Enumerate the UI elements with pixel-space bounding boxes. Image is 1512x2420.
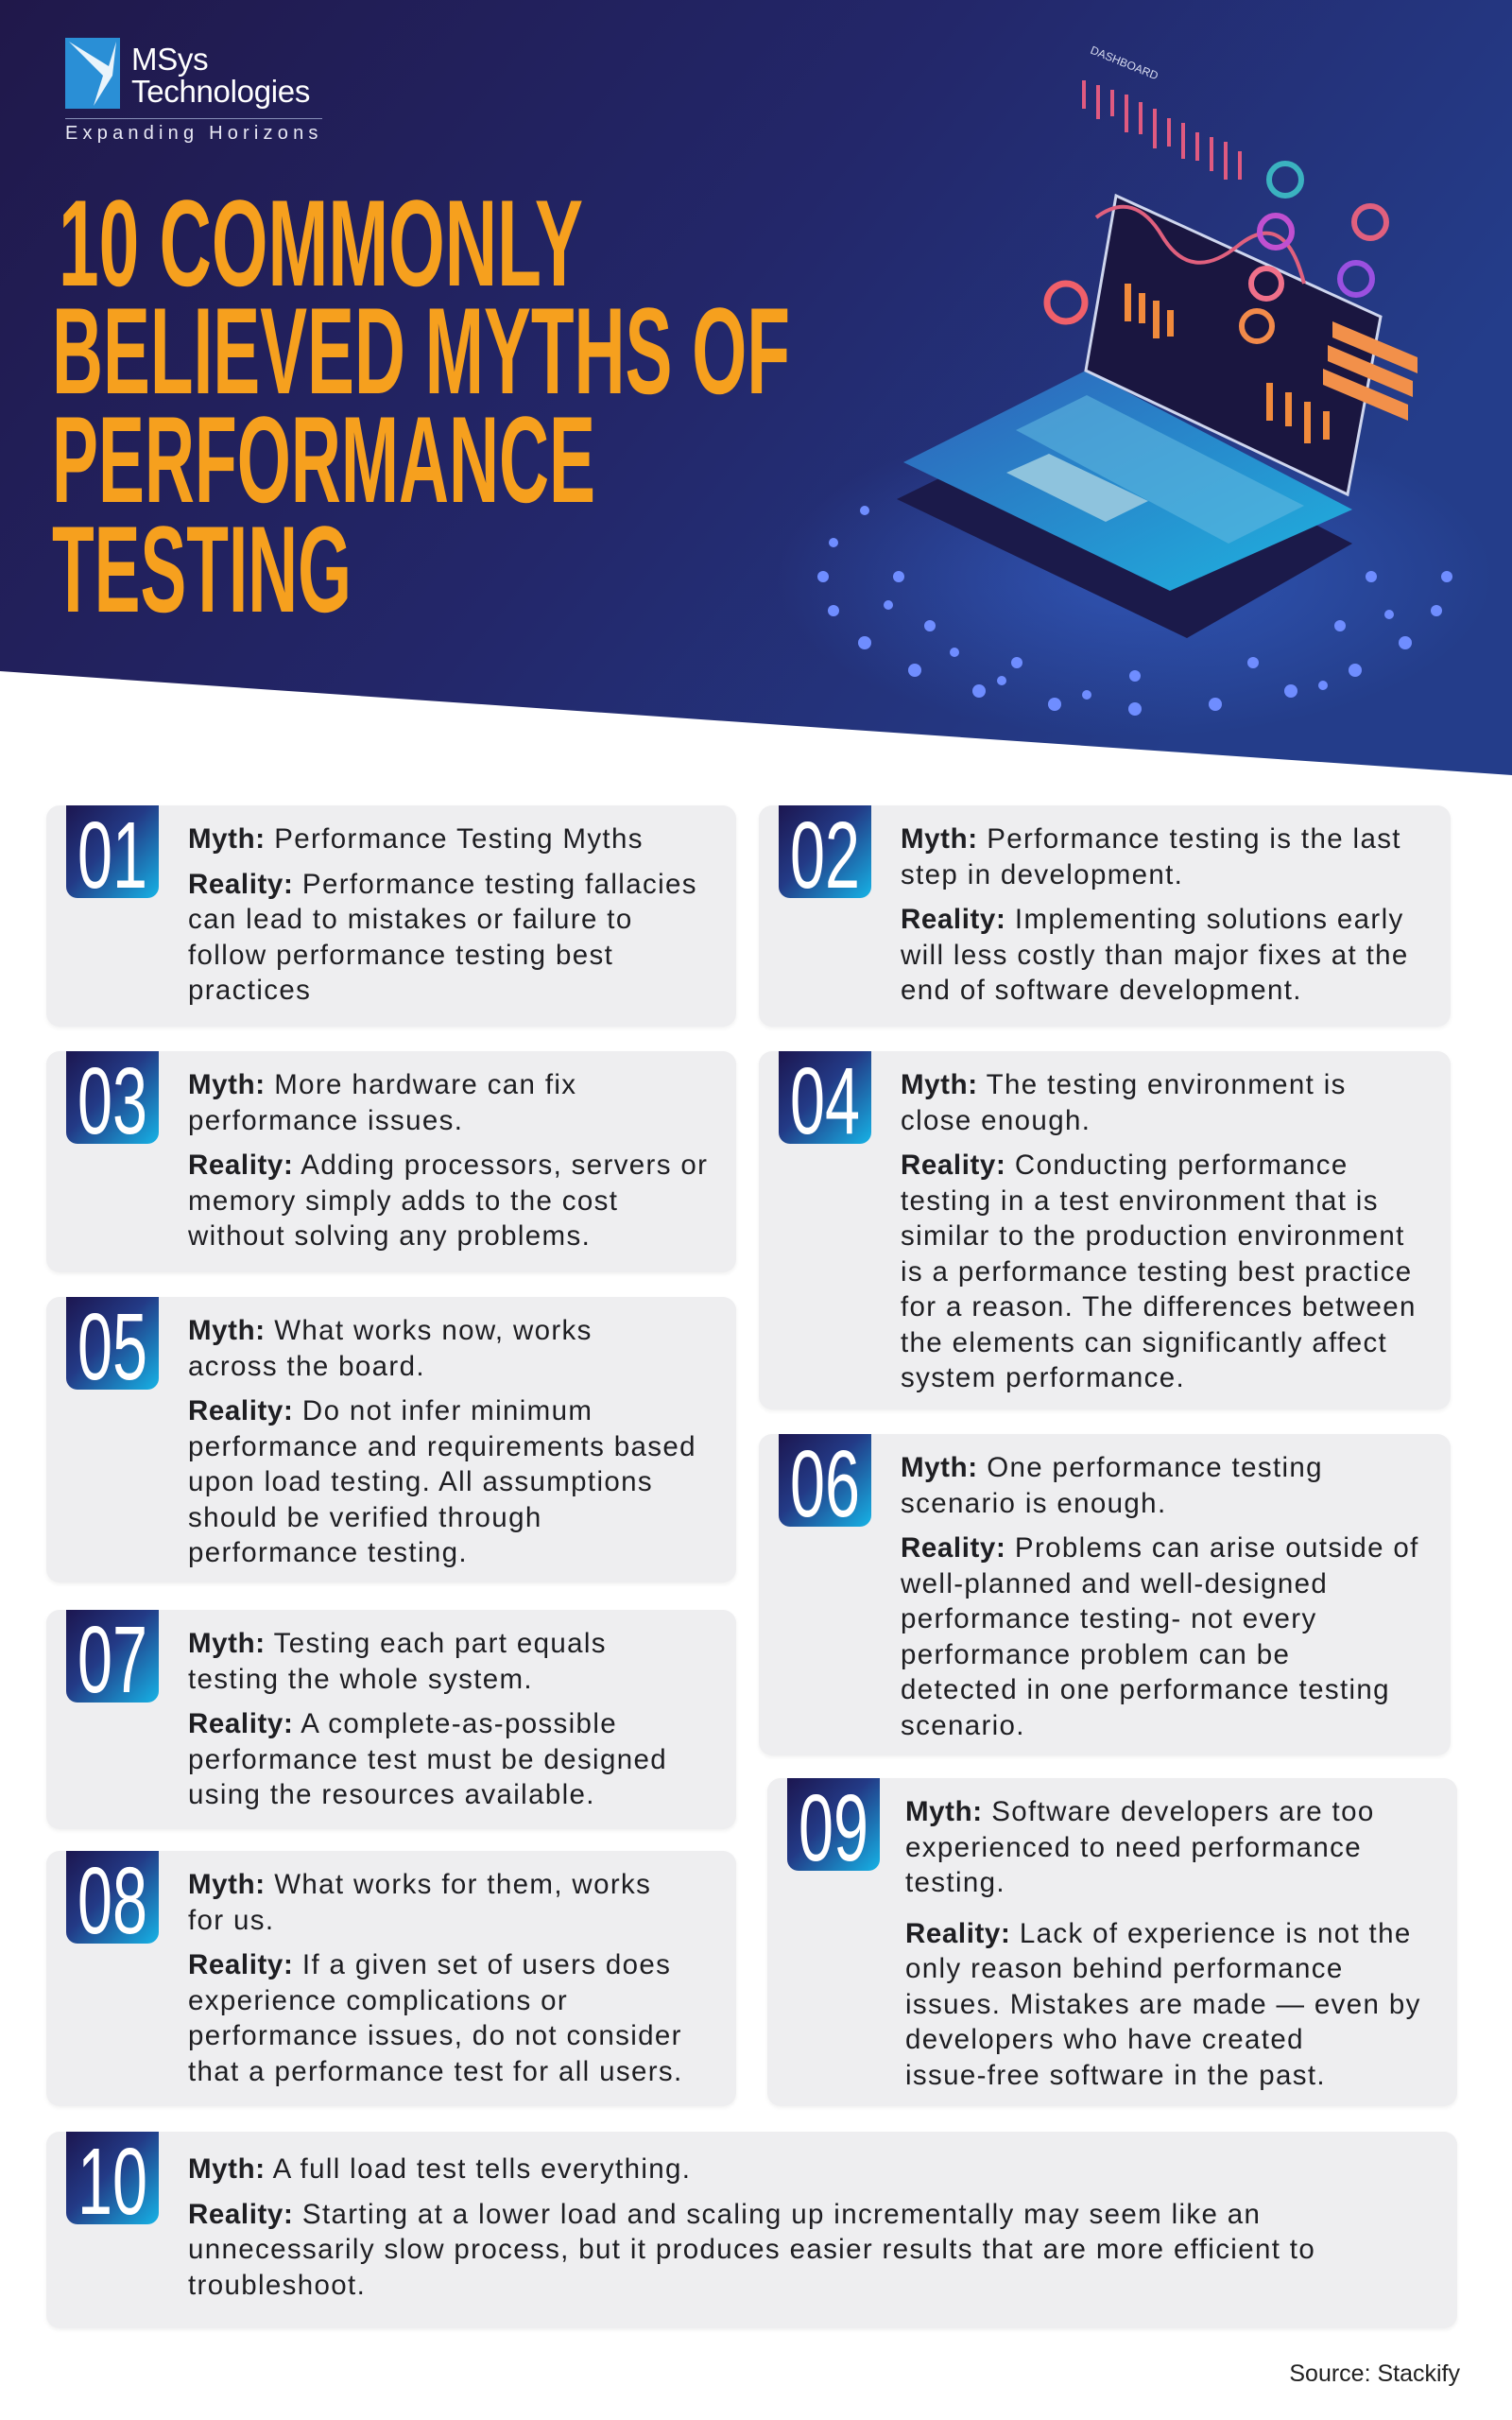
logo text: Technologies bbox=[131, 74, 310, 109]
text 01: Reality: Performance testing fallacies bbox=[188, 868, 697, 900]
text 08: that a performance test for all users. bbox=[188, 2055, 683, 2087]
card 03 bbox=[46, 1051, 736, 1272]
text 09 bbox=[905, 1796, 1421, 2091]
text 09: only reason behind performance bbox=[905, 1953, 1344, 1984]
text 06: performance testing- not every bbox=[901, 1603, 1317, 1634]
text 06: well-planned and well-designed bbox=[901, 1567, 1328, 1599]
text 03: Reality: Adding processors, servers or bbox=[188, 1150, 708, 1181]
text 01: follow performance testing best bbox=[188, 940, 613, 970]
text 07: testing the whole system. bbox=[188, 1664, 533, 1694]
text 08: performance issues, do not consider bbox=[188, 2020, 682, 2051]
text 08: Reality: If a given set of users does bbox=[188, 1949, 671, 1980]
text 10 bbox=[188, 2153, 1315, 2301]
text 01: Myth: Performance Testing Myths bbox=[188, 823, 644, 855]
text 03 bbox=[188, 1069, 708, 1252]
text 06: detected in one performance testing bbox=[901, 1674, 1390, 1705]
text 03: Myth: More hardware can fix bbox=[188, 1069, 576, 1100]
text 04: is a performance testing best practice bbox=[901, 1255, 1413, 1288]
text 05: should be verified through bbox=[188, 1501, 542, 1533]
card 05 bbox=[46, 1297, 736, 1582]
text 04: the elements can significantly affect bbox=[901, 1327, 1387, 1357]
text 05: upon load testing. All assumptions bbox=[188, 1466, 653, 1497]
text 09: issues. Mistakes are made — even by bbox=[905, 1989, 1421, 2019]
logo text: MSys bbox=[131, 42, 208, 77]
title bbox=[52, 174, 790, 638]
text 05 bbox=[188, 1315, 696, 1568]
text 04: testing in a test environment that is bbox=[901, 1185, 1379, 1216]
text 10: unnecessarily slow process, but it produces easier results that are more efficient to bbox=[188, 2234, 1315, 2265]
text 06: scenario is enough. bbox=[901, 1488, 1166, 1518]
text 02 bbox=[901, 823, 1409, 1006]
tagline: Expanding Horizons bbox=[65, 123, 323, 144]
card 09 bbox=[767, 1778, 1457, 2106]
text 04: close enough. bbox=[901, 1104, 1091, 1136]
text 02: Reality: Implementing solutions early bbox=[901, 904, 1404, 935]
text 05: performance testing. bbox=[188, 1537, 468, 1568]
text 01 bbox=[188, 823, 697, 1006]
text 01: practices bbox=[188, 975, 311, 1006]
text 07: Reality: A complete-as-possible bbox=[188, 1708, 617, 1739]
text 06: performance problem can be bbox=[901, 1639, 1290, 1669]
card 08 bbox=[46, 1851, 736, 2106]
text 10: Reality: Starting at a lower load and scaling up incrementally may seem like an bbox=[188, 2199, 1261, 2229]
text 07: using the resources available. bbox=[188, 1779, 595, 1810]
text 06: Myth: One performance testing bbox=[901, 1452, 1323, 1483]
text 03: performance issues. bbox=[188, 1104, 463, 1136]
logo bbox=[65, 38, 323, 144]
text 08 bbox=[188, 1869, 683, 2087]
text 10: Myth: A full load test tells everything. bbox=[188, 2153, 691, 2185]
text 04: system performance. bbox=[901, 1362, 1185, 1393]
text 01: can lead to mistakes or failure to bbox=[188, 904, 633, 935]
text 07: Myth: Testing each part equals bbox=[188, 1628, 607, 1659]
text 06: Reality: Problems can arise outside of bbox=[901, 1532, 1419, 1564]
text 07: performance test must be designed bbox=[188, 1743, 667, 1775]
card 06 bbox=[759, 1434, 1451, 1755]
icon: logo mark bbox=[65, 38, 120, 109]
card 01 bbox=[46, 805, 736, 1027]
text 06: scenario. bbox=[901, 1709, 1025, 1741]
header background bbox=[0, 0, 1512, 775]
text 07 bbox=[188, 1628, 667, 1810]
source note: Source: Stackify bbox=[1289, 2360, 1460, 2387]
text 09: issue-free software in the past. bbox=[905, 2059, 1326, 2091]
text 05: performance and requirements based bbox=[188, 1431, 696, 1461]
text 05: Myth: What works now, works bbox=[188, 1315, 593, 1346]
card 02 bbox=[759, 805, 1451, 1027]
title: TESTING bbox=[52, 500, 352, 638]
text 09: developers who have created bbox=[905, 2024, 1304, 2055]
text 02: Myth: Performance testing is the last bbox=[901, 823, 1401, 855]
card 10 bbox=[46, 2132, 1457, 2328]
illustration: laptop with dashboard bbox=[776, 43, 1494, 737]
text 08: for us. bbox=[188, 1904, 274, 1936]
logo text bbox=[131, 42, 310, 109]
text 08: Myth: What works for them, works bbox=[188, 1869, 651, 1900]
text 04: similar to the production environment bbox=[901, 1220, 1405, 1252]
text 04: Myth: The testing environment is bbox=[901, 1069, 1347, 1100]
text 09: Myth: Software developers are too bbox=[905, 1796, 1375, 1827]
text 03: memory simply adds to the cost bbox=[188, 1185, 618, 1216]
text 05: across the board. bbox=[188, 1350, 425, 1382]
text 09: experienced to need performance bbox=[905, 1832, 1362, 1862]
text 06 bbox=[901, 1452, 1419, 1741]
text 02: end of software development. bbox=[901, 975, 1302, 1006]
illustration: laptop with dashboard: DASHBOARD bbox=[1089, 43, 1160, 82]
text 02: will less costly than major fixes at the bbox=[901, 940, 1409, 970]
text 04 bbox=[901, 1069, 1417, 1393]
card 04 bbox=[759, 1051, 1451, 1409]
text 05: Reality: Do not infer minimum bbox=[188, 1395, 593, 1426]
text 09: testing. bbox=[905, 1867, 1005, 1898]
text 10: troubleshoot. bbox=[188, 2269, 366, 2301]
card 07 bbox=[46, 1610, 736, 1829]
text 04: for a reason. The differences between bbox=[901, 1291, 1417, 1322]
text 08: experience complications or bbox=[188, 1985, 568, 2015]
text 04: Reality: Conducting performance bbox=[901, 1150, 1349, 1181]
text 09: Reality: Lack of experience is not the bbox=[905, 1917, 1412, 1949]
text 02: step in development. bbox=[901, 858, 1183, 890]
text 03: without solving any problems. bbox=[188, 1220, 591, 1252]
